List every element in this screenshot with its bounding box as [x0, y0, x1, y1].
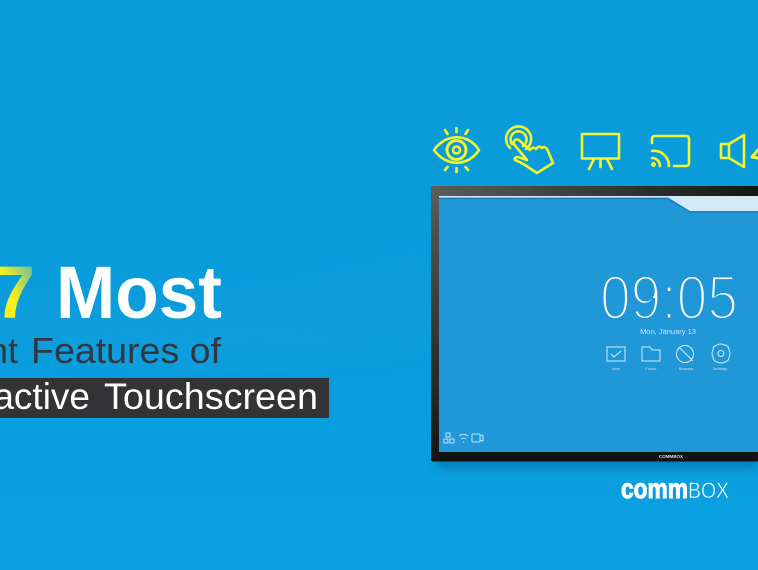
clock: 09:05	[600, 264, 738, 333]
app icons	[607, 344, 730, 371]
icon: cast	[652, 136, 689, 166]
title	[0, 251, 329, 418]
feature icons row	[434, 126, 758, 173]
icon: browser: Browser	[679, 366, 694, 371]
display screen	[439, 196, 758, 452]
logo: CommBox: BOX	[688, 478, 729, 503]
title line 3: highlighted bar: Touchscreen	[104, 376, 318, 417]
display shadow	[436, 457, 758, 467]
title line 3: highlighted bar	[0, 376, 329, 418]
title line 2: Important Features of: Features of	[31, 330, 222, 371]
icon: finder: Finder	[645, 366, 657, 371]
touchscreen display	[431, 186, 758, 467]
title line 1: 7 Most: Most	[56, 251, 222, 334]
icon: speaker	[721, 135, 758, 167]
date: Mon, January 13	[640, 327, 696, 336]
icon: presentation screen	[582, 134, 619, 169]
bezel logo: COMMBOX	[659, 454, 683, 459]
icon: note: Note	[612, 366, 621, 371]
icon: eye	[434, 128, 479, 172]
logo: CommBox: comm	[621, 473, 688, 504]
icon: touch hand	[506, 126, 553, 173]
screen top tab	[439, 196, 758, 212]
status icons	[444, 433, 483, 443]
display bezel	[431, 186, 758, 462]
icon: settings: Settings	[713, 366, 727, 371]
